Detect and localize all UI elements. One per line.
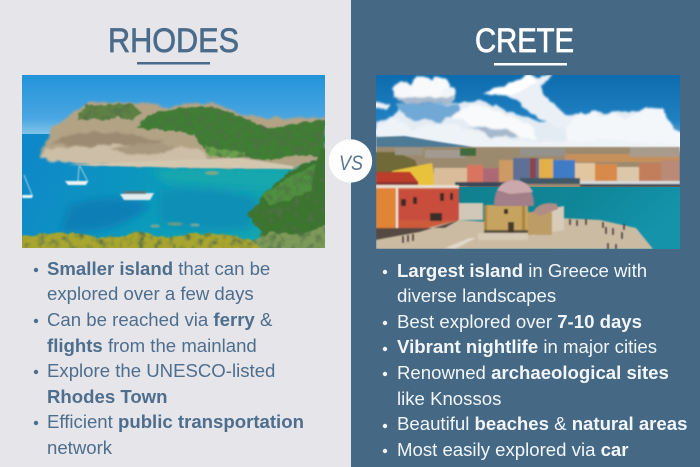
- heading: Crete: CRETE: [475, 22, 574, 60]
- panel: Rhodes: [22, 28, 325, 454]
- bullet: public transportation: network: [47, 437, 113, 458]
- bullet: public transportation: [34, 411, 304, 458]
- photo: Crete harbour with domed mosque, colourful houses and clouds: [372, 75, 684, 249]
- people: [402, 219, 625, 249]
- red building: [376, 172, 418, 182]
- bullet: smaller island: [34, 258, 270, 304]
- bullet: smaller island: Smaller island that can be: [47, 258, 270, 279]
- bullet: ferry and flights: [34, 309, 273, 356]
- quay: [376, 218, 653, 249]
- bullet: days: Best explored over 7-10 days: [397, 311, 642, 332]
- badge: VS: [329, 139, 372, 183]
- bullet list: Rhodes facts: [34, 258, 304, 458]
- bullet: largest island: Largest island in Greece with: [397, 260, 647, 281]
- heading underline: Crete: [494, 63, 567, 66]
- heading: Rhodes: RHODES: [108, 22, 239, 60]
- bullet: ferry and flights: flights from the mainland: [47, 335, 257, 356]
- bullet: UNESCO town: Explore the UNESCO-listed: [47, 360, 275, 381]
- bullet: public transportation: Efficient public transportation: [47, 411, 304, 432]
- bullet: UNESCO town: Rhodes Town: [47, 386, 168, 407]
- bullet: archaeological sites: like Knossos: [397, 388, 501, 409]
- badge: VS: VS: [339, 152, 363, 175]
- bullet: archaeological sites: [383, 362, 669, 409]
- bullet: car: Most easily explored via car: [397, 439, 629, 460]
- bullet: beaches: Beautiful beaches & natural areas: [397, 413, 687, 434]
- bullet: nightlife: Vibrant nightlife in major cities: [397, 336, 657, 357]
- bullet list: Crete facts: [383, 260, 687, 460]
- bullet: smaller island: explored over a few days: [47, 283, 254, 304]
- heading underline: Rhodes: [137, 62, 210, 64]
- photo: Rhodes bay with headland, turquoise water and boats: [18, 75, 330, 250]
- bullet: archaeological sites: Renowned archaeological sites: [397, 362, 669, 383]
- bullet: UNESCO town: [34, 360, 275, 407]
- bullet: largest island: diverse landscapes: [397, 285, 556, 306]
- panel: Crete: [351, 0, 700, 467]
- bullet: ferry and flights: Can be reached via ferry &: [47, 309, 273, 330]
- bullet: largest island: [383, 260, 647, 306]
- mosque: [532, 206, 564, 236]
